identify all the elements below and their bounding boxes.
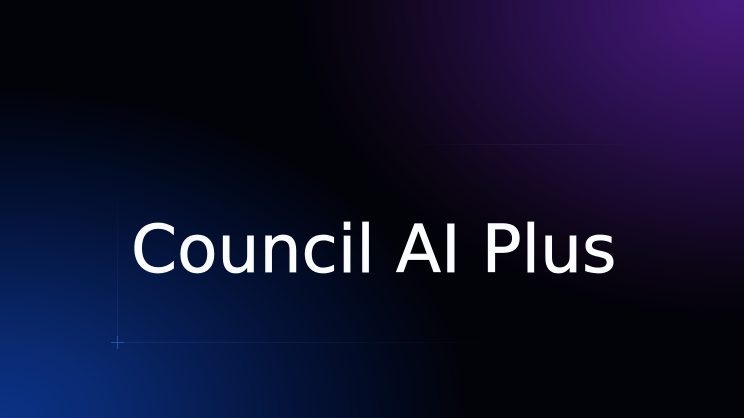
title: Council AI Plus <box>131 211 617 288</box>
